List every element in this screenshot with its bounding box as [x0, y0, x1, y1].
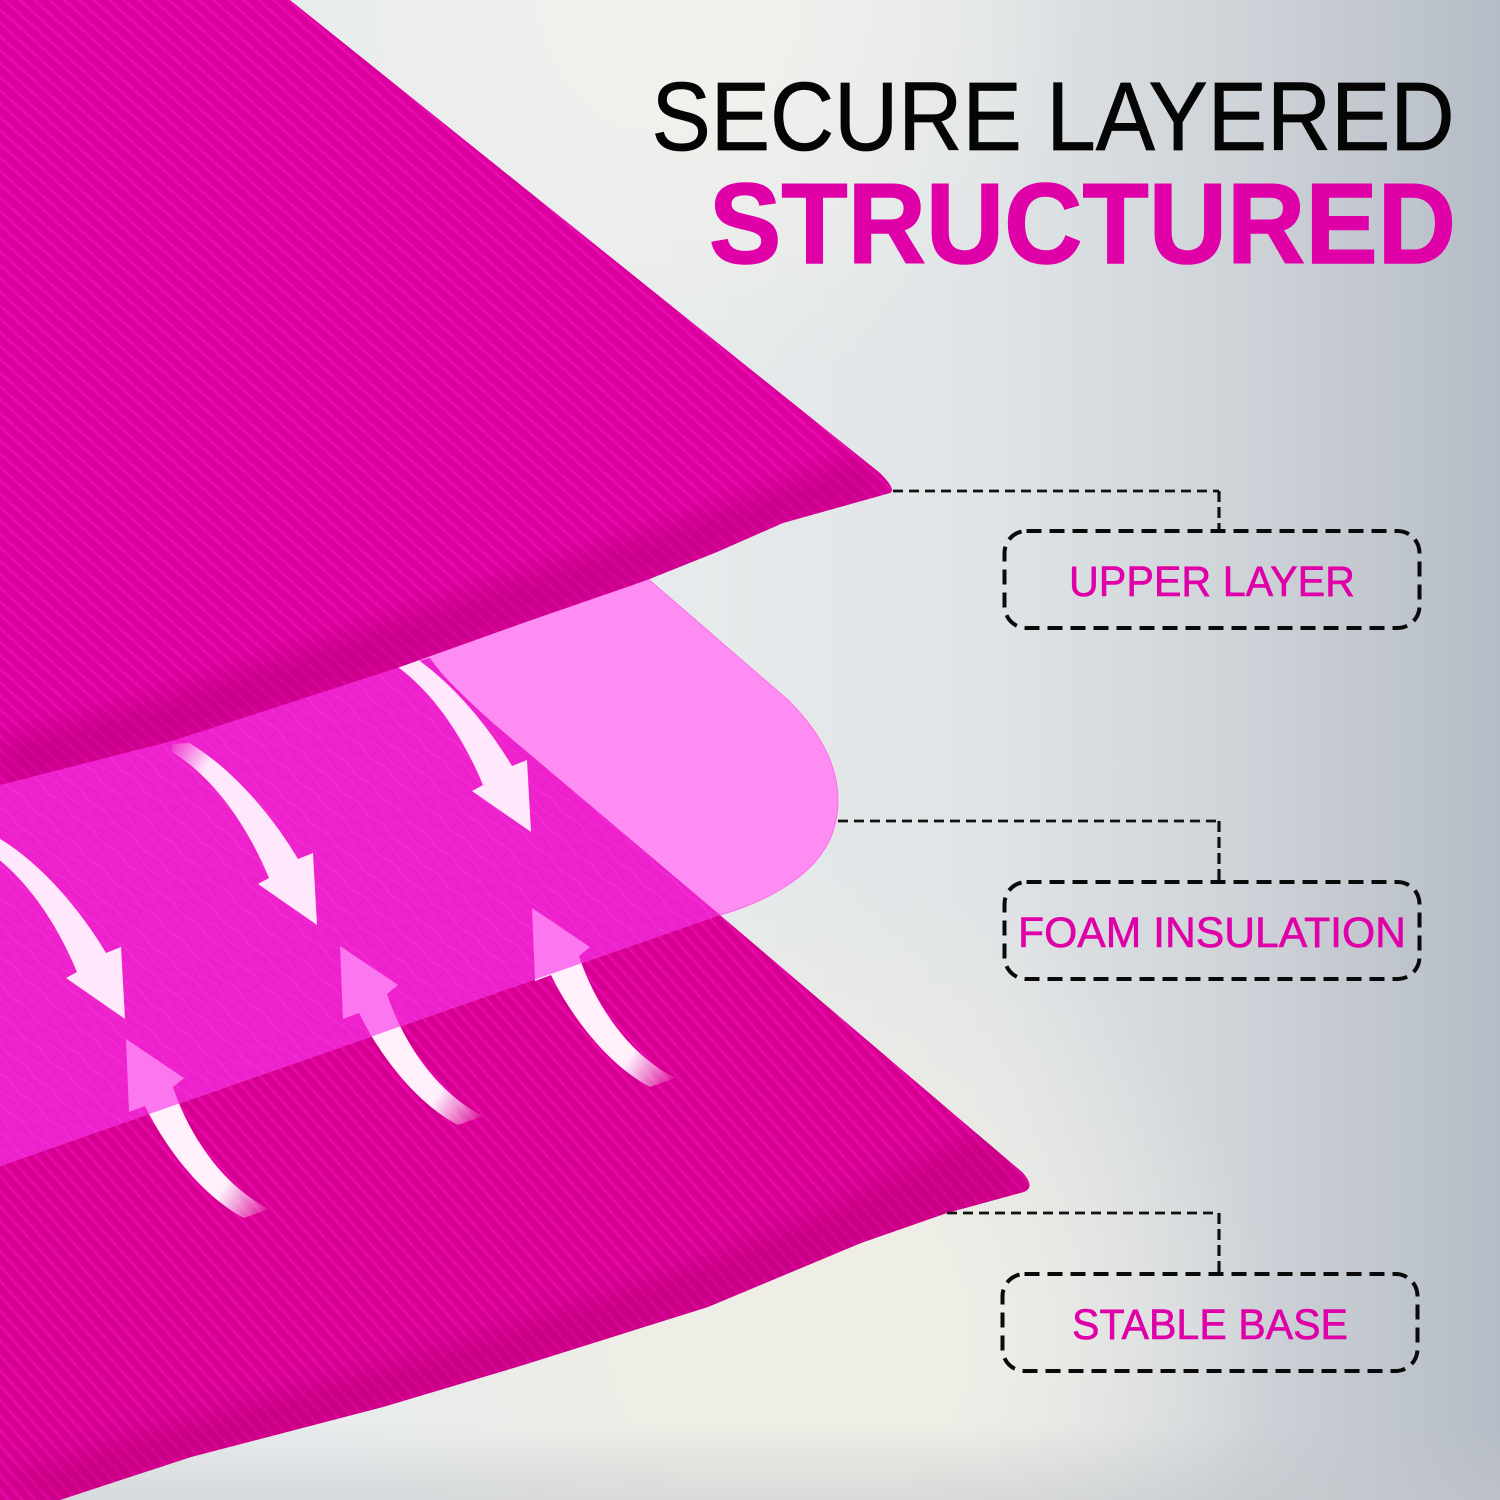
arrow: upward right: [532, 908, 675, 1087]
panel: foam insulation magenta sheet: [0, 658, 720, 1166]
callout: foam insulation: [838, 821, 1420, 979]
foam flat underlay: [0, 658, 720, 1166]
group: downward arrows from upper layer: [0, 650, 531, 1019]
title: [652, 62, 1456, 288]
arrow: upward left: [126, 1039, 269, 1218]
arrow: upward middle: [340, 946, 483, 1125]
arrow: downward right: [386, 650, 531, 832]
group: upward arrows from base layer: [126, 908, 675, 1218]
arrow: downward left: [0, 837, 125, 1019]
panel: upper mat layer: [0, 0, 895, 790]
callout: stable base: [947, 1213, 1418, 1371]
callout: foam insulation: FOAM INSULATION: [1018, 909, 1406, 957]
callout: stable base: STABLE BASE: [1072, 1301, 1348, 1349]
callout: upper layer: UPPER LAYER: [1069, 558, 1355, 606]
title line: structured: STRUCTURED: [709, 161, 1456, 288]
arrow: downward middle: [172, 743, 317, 925]
callout: upper layer: [893, 491, 1420, 628]
panel: stable base mat layer: [0, 915, 1035, 1500]
panel: foam insulation light outer edge: [400, 578, 838, 915]
